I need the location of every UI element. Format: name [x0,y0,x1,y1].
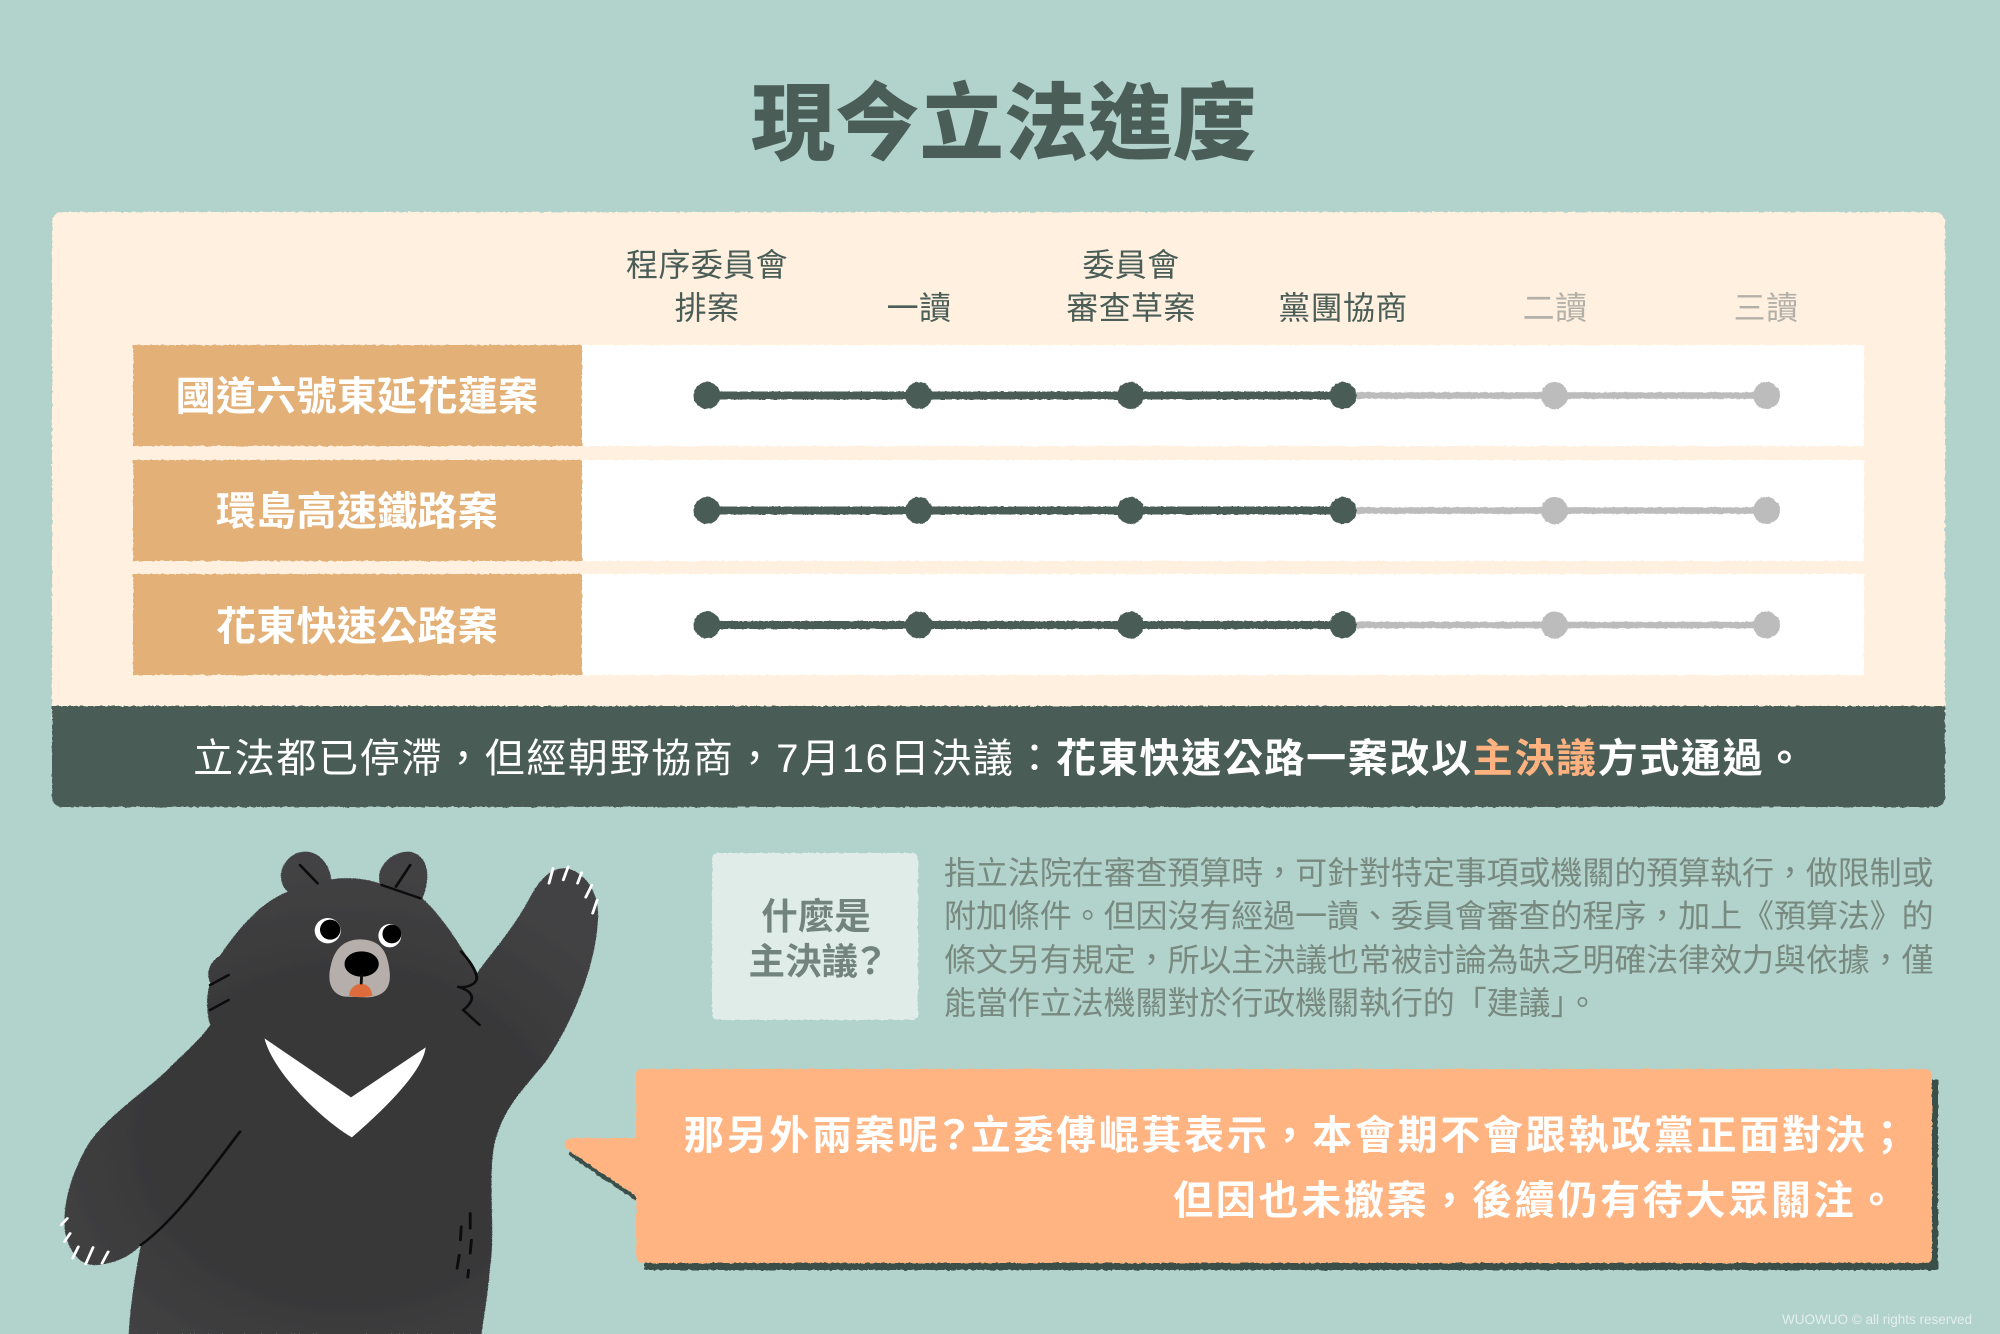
definition box background [712,853,918,1020]
definition box [712,852,919,1021]
bear muzzle [329,939,390,997]
bear nose [344,951,379,977]
row label background [133,345,582,446]
row: 環島高速鐵路案 [132,459,1865,562]
row track background [581,460,1864,561]
row track background [581,345,1864,446]
definition text [944,854,1934,1021]
icon: Formosan black bear waving [60,851,599,1334]
column header: 程序委員會排案 [626,247,788,326]
definition heading: 主決議？ [749,941,883,982]
panel background [52,212,1945,722]
definition heading: 什麼是 [761,896,871,937]
row label: 環島高速鐵路案 [216,490,498,534]
row label background [133,460,582,561]
column header: 程序委員會排案: 排案 [675,290,739,326]
bubble text line 2: 但因也未撤案，後續仍有待大眾關注。 [1173,1179,1899,1223]
definition text: 指立法院在審查預算時，可針對特定事項或機關的預算執行，做限制或 [944,854,1934,890]
definition heading [749,896,883,982]
definition text: 條文另有規定，所以主決議也常被討論為缺乏明確法律效力與依據，僅 [944,942,1934,978]
bear claws [61,867,597,1264]
row: 花東快速公路案 [132,573,1865,676]
column header: 三讀: 三讀 [1734,290,1798,326]
row label: 花東快速公路案 [216,605,498,649]
progress track [694,496,1780,524]
column header: 一讀: 一讀 [887,290,951,326]
summary bar [52,705,1946,808]
summary text: 立法都已停滯，但經朝野協商，7月16日決議：花東快速公路一案改以主決議方式通過。 [193,737,1806,781]
bear fur lines [141,865,480,1277]
definition text: 能當作立法機關對於行政機關執行的「建議」。 [944,985,1598,1021]
column header: 委員會審查草案: 委員會 [1082,247,1180,283]
row label: 國道六號東延花蓮案 [176,375,538,419]
row: 國道六號東延花蓮案 [132,344,1865,447]
bear body [64,852,598,1334]
definition text: 附加條件。但因沒有經過一讀、委員會審查的程序，加上《預算法》的 [944,898,1934,934]
summary bar background [52,706,1945,807]
bear chest marking [264,1038,426,1137]
speech bubble [564,1068,1939,1271]
column header: 委員會審查草案: 審查草案 [1066,290,1196,326]
progress track [694,611,1780,639]
panel: legislative progress table [51,211,1946,722]
bubble text line 1: 那另外兩案呢？立委傅崐萁表示，本會期不會跟執政黨正面對決； [684,1114,1910,1158]
column header: 黨團協商: 黨團協商 [1278,290,1408,326]
bear tongue [349,984,372,997]
column header: 委員會審查草案 [1066,247,1196,326]
row label background [133,574,582,675]
row track background [581,574,1864,675]
bubble shadow and body [564,1068,1939,1271]
progress track [694,382,1780,410]
title: 現今立法進度 [751,76,1257,170]
column header: 二讀: 二讀 [1523,290,1587,326]
copyright note: WUOWUO © all rights reserved [1782,1312,1972,1327]
column header: 程序委員會排案: 程序委員會 [626,247,788,283]
bear eyes [315,918,401,947]
